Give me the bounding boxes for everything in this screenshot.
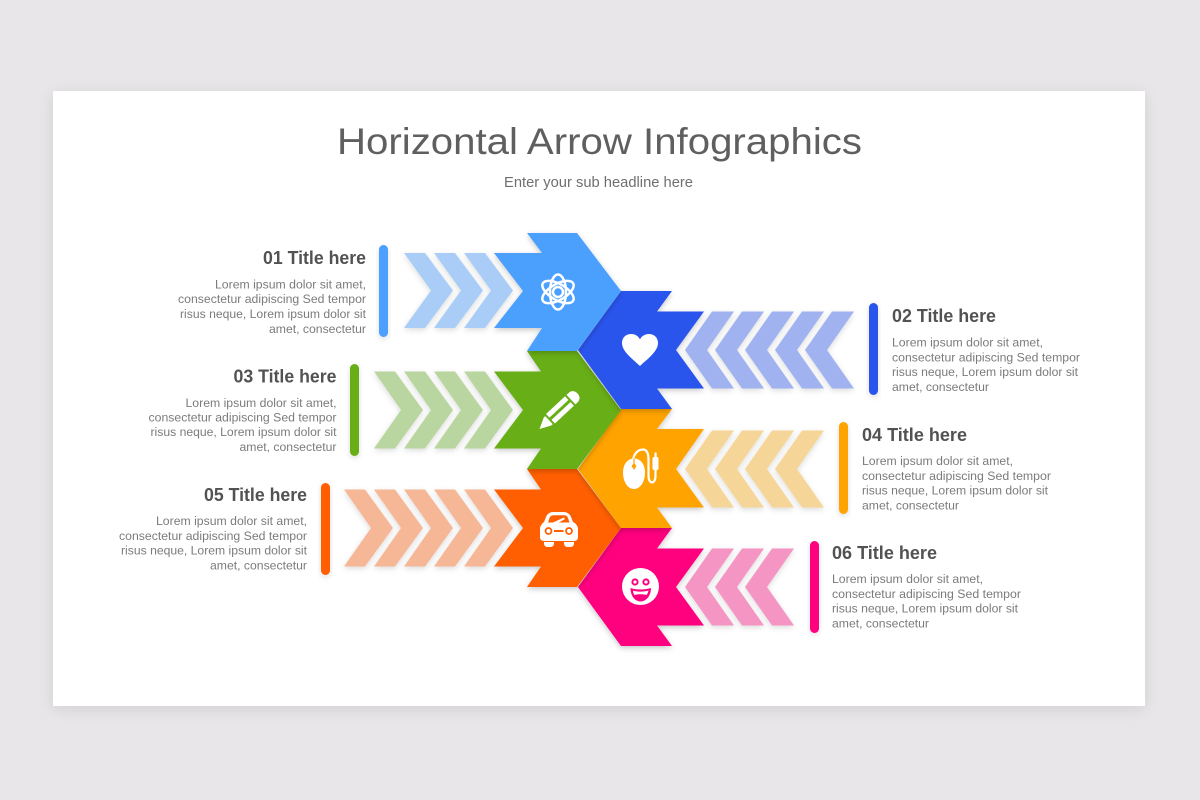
- text block 06: 06 Title here: [832, 543, 937, 563]
- chevrons 05: [344, 490, 513, 566]
- slide card: [53, 91, 1145, 706]
- text block 06: amet, consectetur: [832, 616, 929, 630]
- text block 03: Lorem ipsum dolor sit amet,: [186, 396, 336, 410]
- accent bar 01: [379, 245, 388, 337]
- subtitle: Enter your sub headline here: [504, 175, 693, 191]
- arrow 06: [578, 528, 704, 646]
- text block 04: Lorem ipsum dolor sit amet,: [862, 454, 1013, 468]
- chevrons 06: [685, 548, 794, 626]
- text block 06: risus neque, Lorem ipsum dolor sit: [832, 602, 1019, 616]
- text block 01: consectetur adipiscing Sed tempor: [178, 292, 366, 306]
- arrow 04: [578, 409, 704, 528]
- text block 01: 01 Title here: [263, 248, 366, 268]
- text block 06: consectetur adipiscing Sed tempor: [832, 587, 1021, 601]
- icon: smiley: [622, 568, 659, 605]
- text block 06: [832, 543, 1021, 630]
- icon: car: [540, 512, 578, 547]
- text block 01: Lorem ipsum dolor sit amet,: [215, 278, 366, 292]
- chevrons 04: [685, 430, 824, 508]
- text block 01: amet, consectetur: [269, 322, 366, 336]
- title: Horizontal Arrow Infographics: [337, 121, 862, 162]
- icon: mouse: [623, 450, 658, 489]
- chevrons 02: [685, 312, 854, 388]
- text block 05: [119, 485, 308, 572]
- text block 02: Lorem ipsum dolor sit amet,: [892, 336, 1043, 350]
- chevrons 01: [404, 253, 513, 328]
- panel: 06 pink arrow row: [578, 528, 1021, 646]
- text block 02: amet, consectetur: [892, 380, 989, 394]
- text block 02: [892, 306, 1080, 394]
- text block 02: risus neque, Lorem ipsum dolor sit: [892, 365, 1079, 379]
- text block 03: [148, 366, 337, 454]
- arrow 03: [494, 351, 621, 469]
- arrow 05: [494, 469, 621, 587]
- text block 05: Lorem ipsum dolor sit amet,: [156, 514, 307, 528]
- text block 03: risus neque, Lorem ipsum dolor sit: [150, 425, 337, 439]
- accent bar 02: [869, 303, 878, 395]
- text block 06: Lorem ipsum dolor sit amet,: [832, 572, 983, 586]
- accent bar 04: [839, 422, 848, 514]
- chevrons 03: [374, 372, 513, 448]
- text block 04: risus neque, Lorem ipsum dolor sit: [862, 484, 1049, 498]
- panel: 03 green arrow row: [148, 351, 621, 469]
- text block 03: consectetur adipiscing Sed tempor: [148, 410, 336, 424]
- text block 03: 03 Title here: [234, 366, 336, 386]
- accent bar 03: [350, 364, 359, 456]
- text block 03: amet, consectetur: [240, 440, 336, 454]
- text block 04: [862, 425, 1051, 512]
- text block 01: risus neque, Lorem ipsum dolor sit: [180, 307, 367, 321]
- panel: 01 light blue arrow row: [178, 233, 621, 351]
- text block 05: amet, consectetur: [210, 558, 307, 572]
- accent bar 06: [810, 541, 819, 633]
- text block 04: 04 Title here: [862, 425, 967, 445]
- text block 05: risus neque, Lorem ipsum dolor sit: [121, 544, 308, 558]
- text block 01: [178, 248, 367, 336]
- text block 02: consectetur adipiscing Sed tempor: [892, 350, 1080, 364]
- text block 04: amet, consectetur: [862, 498, 959, 512]
- panel: 02 royal blue arrow row: [578, 291, 1080, 409]
- icon: heart: [622, 334, 658, 366]
- text block 05: consectetur adipiscing Sed tempor: [119, 529, 307, 543]
- text block 04: consectetur adipiscing Sed tempor: [862, 469, 1051, 483]
- arrow 02: [578, 291, 704, 409]
- text block 05: 05 Title here: [204, 485, 307, 505]
- panel: 04 amber arrow row: [578, 409, 1051, 528]
- panel: 05 orange arrow row: [119, 469, 621, 587]
- arrow 01: [494, 233, 621, 351]
- text block 02: 02 Title here: [892, 306, 996, 326]
- icon: pencil: [535, 389, 582, 434]
- icon: atom: [539, 274, 577, 310]
- accent bar 05: [321, 483, 330, 575]
